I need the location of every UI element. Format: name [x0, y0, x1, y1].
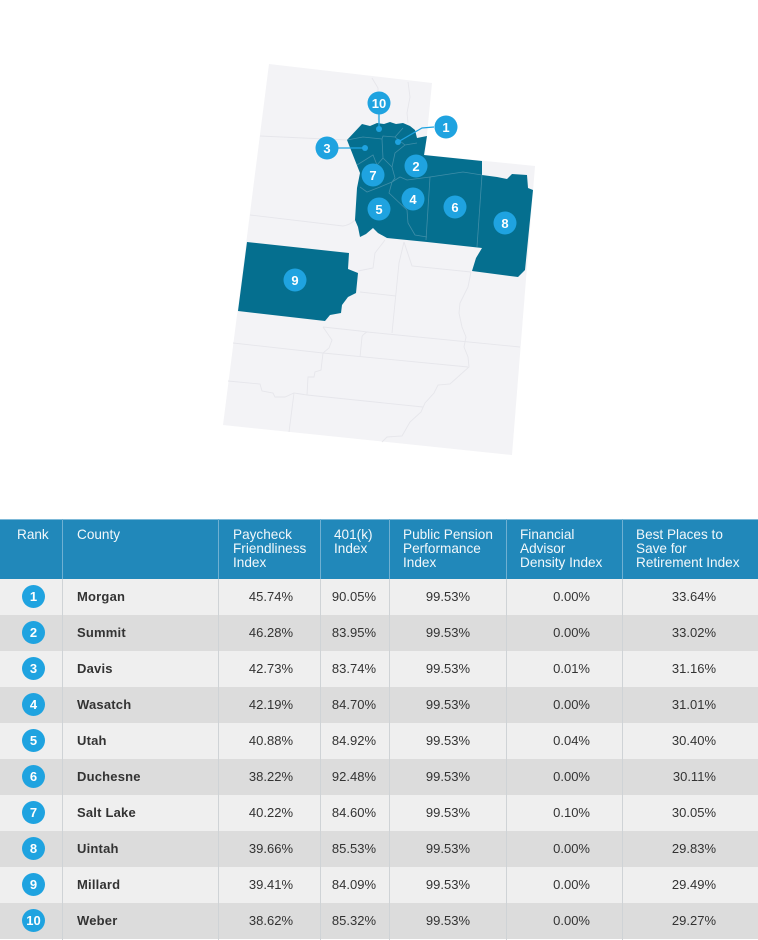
- header: public pension: Performance: [403, 541, 481, 556]
- row 10: Weber: 29.27%: [672, 913, 716, 928]
- row 6: Duchesne: 92.48%: [332, 769, 376, 784]
- highlighted county: Millard: [238, 242, 358, 321]
- marker 7: Salt Lake: [362, 164, 384, 186]
- marker 7: Salt Lake: 7: [369, 168, 377, 183]
- row 4: Wasatch: 84.70%: [332, 697, 376, 712]
- header: paycheck friendliness: [233, 527, 306, 570]
- marker 10: Weber: [368, 92, 390, 132]
- table header: [0, 519, 758, 579]
- row 2: Summit: [0, 615, 758, 651]
- row 10: Weber: 38.62%: [249, 913, 293, 928]
- row 1: Morgan: 45.74%: [249, 589, 293, 604]
- row 2: Summit: 46.28%: [249, 625, 293, 640]
- row 5: Utah: 30.40%: [672, 733, 716, 748]
- row 2: Summit: 33.02%: [672, 625, 716, 640]
- row 10: Weber: [0, 903, 758, 939]
- county borders, unhighlighted counties: [228, 78, 520, 442]
- marker 1: Morgan: [395, 116, 458, 145]
- row 7: Salt Lake: 30.05%: [672, 805, 716, 820]
- row 1: Morgan: Morgan: [77, 589, 125, 604]
- row 7: Salt Lake: 40.22%: [249, 805, 293, 820]
- row 8: Uintah: 0.00%: [553, 841, 590, 856]
- header: financial advisor: [520, 527, 602, 570]
- header: 401(k): Index: [334, 541, 367, 556]
- header: best places: [636, 527, 740, 570]
- row 2: Summit: 2: [30, 625, 37, 640]
- row 8: Uintah: [0, 831, 758, 867]
- row 6: Duchesne: [0, 759, 758, 795]
- header: financial advisor: Advisor: [520, 541, 565, 556]
- row 10: Weber: 85.32%: [332, 913, 376, 928]
- header: financial advisor: Density Index: [520, 555, 602, 570]
- row 5: Utah: 0.04%: [553, 733, 590, 748]
- marker 10: Weber: 10: [372, 96, 386, 111]
- row 9: Millard: 29.49%: [672, 877, 716, 892]
- row 10: Weber: 99.53%: [426, 913, 470, 928]
- row 10: Weber: 10: [26, 913, 41, 928]
- row 6: Duchesne: 30.11%: [673, 769, 716, 784]
- header: county: County: [77, 527, 120, 542]
- row 6: Duchesne: 6: [30, 769, 37, 784]
- row 6: Duchesne: 99.53%: [426, 769, 470, 784]
- row 4: Wasatch: 4: [30, 697, 37, 712]
- row 9: Millard: [0, 867, 758, 903]
- header: paycheck friendliness: Friendliness: [233, 541, 306, 556]
- header: paycheck friendliness: Paycheck: [233, 527, 292, 542]
- row 4: Wasatch: [0, 687, 758, 723]
- row 8: Uintah: 99.53%: [426, 841, 470, 856]
- state outline: [223, 64, 535, 455]
- row 10: Weber: Weber: [77, 913, 118, 928]
- header: best places: Save for: [636, 541, 687, 556]
- header: 401(k): 401(k): [334, 527, 373, 542]
- row 5: Utah: 99.53%: [426, 733, 470, 748]
- row 5: Utah: 84.92%: [332, 733, 376, 748]
- marker 8: Uintah: [494, 212, 516, 234]
- header: rank: Rank: [17, 527, 49, 542]
- marker 5: Utah: 5: [375, 202, 383, 217]
- row 1: Morgan: 33.64%: [672, 589, 716, 604]
- marker 5: Utah: [368, 198, 390, 220]
- row 8: Uintah: 8: [30, 841, 37, 856]
- row 4: Wasatch: 31.01%: [672, 697, 716, 712]
- ranking table: [0, 519, 758, 940]
- row 7: Salt Lake: 99.53%: [426, 805, 470, 820]
- marker 6: Duchesne: 6: [451, 200, 459, 215]
- row 6: Duchesne: 38.22%: [249, 769, 293, 784]
- row 3: Davis: Davis: [77, 661, 113, 676]
- header: best places: Retirement Index: [636, 555, 740, 570]
- map of Utah counties: [223, 64, 535, 455]
- row 4: Wasatch: 0.00%: [553, 697, 590, 712]
- row 4: Wasatch: 99.53%: [426, 697, 470, 712]
- header: paycheck friendliness: Index: [233, 555, 266, 570]
- marker 8: Uintah: 8: [501, 216, 509, 231]
- marker 1: Morgan: 1: [442, 120, 450, 135]
- row 3: Davis: 3: [30, 661, 37, 676]
- marker 2: Summit: 2: [412, 159, 420, 174]
- row 3: Davis: 99.53%: [426, 661, 470, 676]
- marker 9: Millard: [284, 268, 306, 292]
- row 7: Salt Lake: 7: [30, 805, 37, 820]
- header: public pension: [403, 527, 493, 570]
- row 7: Salt Lake: Salt Lake: [77, 805, 136, 820]
- row 9: Millard: 39.41%: [249, 877, 293, 892]
- marker 3: Davis: 3: [323, 141, 331, 156]
- row 1: Morgan: [0, 579, 758, 615]
- marker 4: Wasatch: [402, 188, 424, 210]
- row 6: Duchesne: Duchesne: [77, 769, 141, 784]
- marker 4: Wasatch: 4: [409, 192, 417, 207]
- row 5: Utah: 5: [30, 733, 37, 748]
- header: financial advisor: Financial: [520, 527, 574, 542]
- row 2: Summit: Summit: [77, 625, 126, 640]
- row 5: Utah: Utah: [77, 733, 107, 748]
- row 5: Utah: [0, 723, 758, 759]
- row 6: Duchesne: 0.00%: [553, 769, 590, 784]
- row 1: Morgan: 90.05%: [332, 589, 376, 604]
- row 7: Salt Lake: [0, 795, 758, 831]
- row 2: Summit: 83.95%: [332, 625, 376, 640]
- row 1: Morgan: 0.00%: [553, 589, 590, 604]
- row 9: Millard: 0.00%: [553, 877, 590, 892]
- marker 6: Duchesne: [444, 196, 466, 218]
- marker 2: Summit: [404, 154, 428, 178]
- row 7: Salt Lake: 0.10%: [553, 805, 590, 820]
- marker 9: Millard: 9: [291, 273, 299, 288]
- row 8: Uintah: 85.53%: [332, 841, 376, 856]
- row 9: Millard: Millard: [77, 877, 120, 892]
- row 5: Utah: 40.88%: [249, 733, 293, 748]
- header: public pension: Index: [403, 555, 436, 570]
- row 8: Uintah: 39.66%: [249, 841, 293, 856]
- row 8: Uintah: 29.83%: [672, 841, 716, 856]
- header: best places: Best Places to: [636, 527, 723, 542]
- header: public pension: Public Pension: [403, 527, 493, 542]
- row 7: Salt Lake: 84.60%: [332, 805, 376, 820]
- row 1: Morgan: 1: [30, 589, 37, 604]
- row 3: Davis: [0, 651, 758, 687]
- row 9: Millard: 9: [30, 877, 37, 892]
- row 3: Davis: 42.73%: [249, 661, 293, 676]
- row 3: Davis: 83.74%: [332, 661, 376, 676]
- marker 3: Davis: [316, 136, 368, 160]
- row 2: Summit: 99.53%: [426, 625, 470, 640]
- row 8: Uintah: Uintah: [77, 841, 119, 856]
- row 9: Millard: 99.53%: [426, 877, 470, 892]
- row 9: Millard: 84.09%: [332, 877, 376, 892]
- row 3: Davis: 0.01%: [553, 661, 590, 676]
- county borders inside highlighted block: [347, 128, 482, 247]
- row 1: Morgan: 99.53%: [426, 589, 470, 604]
- row 2: Summit: 0.00%: [553, 625, 590, 640]
- row 4: Wasatch: 42.19%: [249, 697, 293, 712]
- row 10: Weber: 0.00%: [553, 913, 590, 928]
- highlighted counties: northern block (ranks 1-8, 10): [347, 122, 533, 277]
- header: 401(k): [334, 527, 373, 556]
- row 4: Wasatch: Wasatch: [77, 697, 131, 712]
- row 3: Davis: 31.16%: [672, 661, 716, 676]
